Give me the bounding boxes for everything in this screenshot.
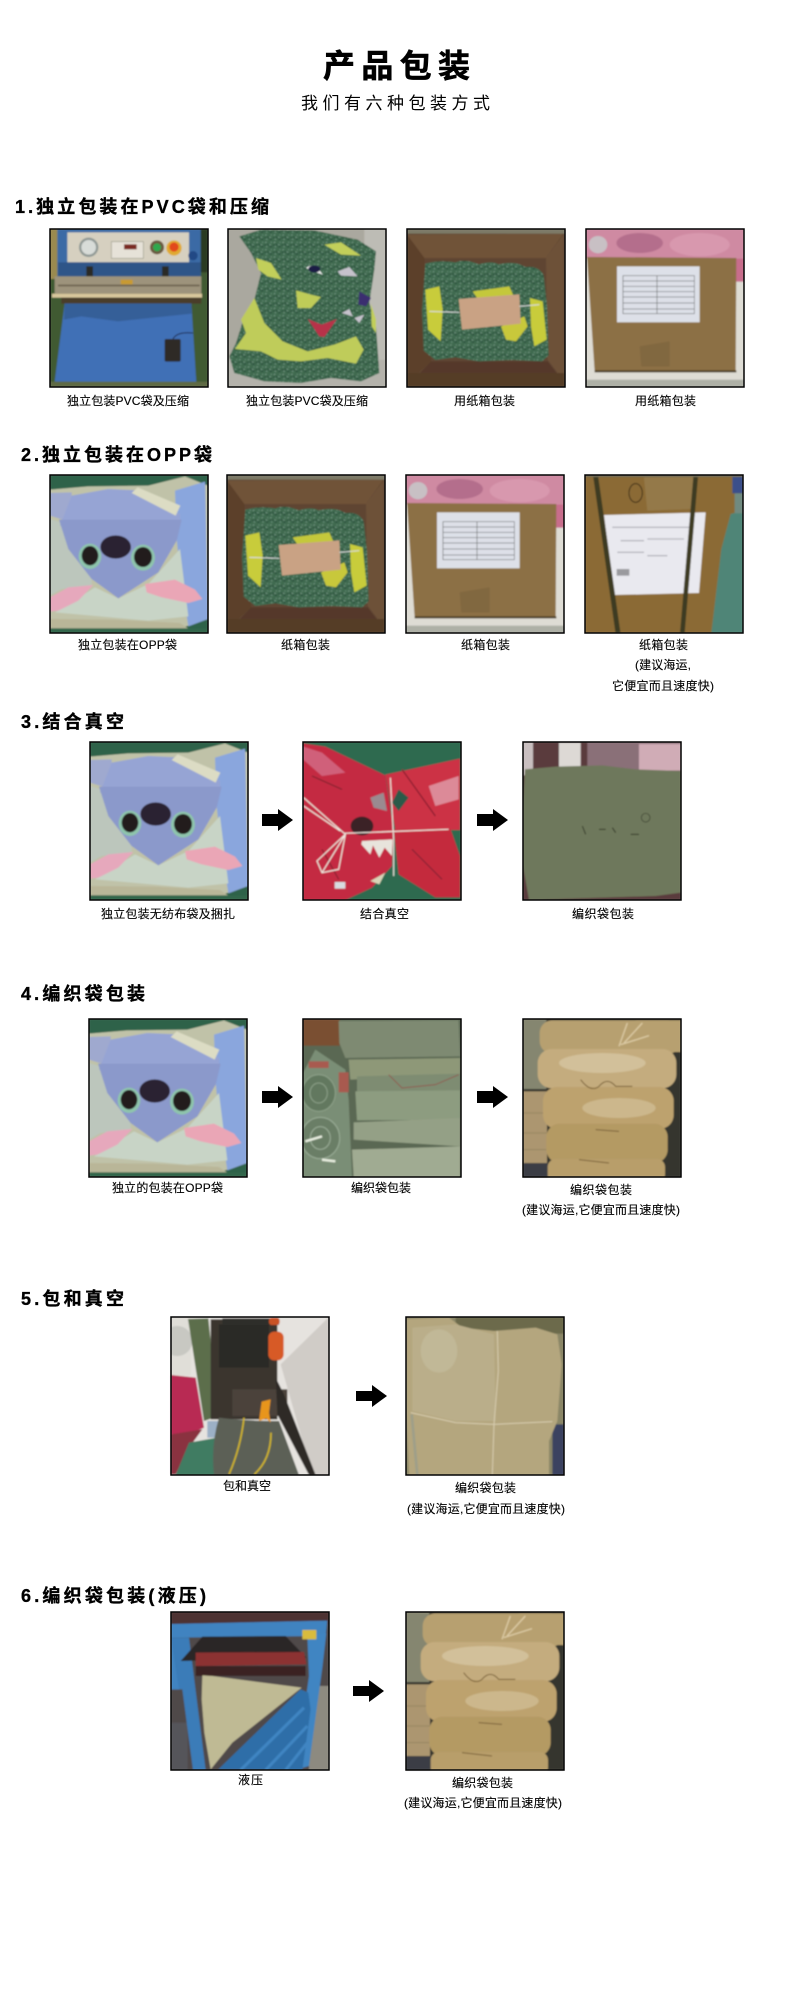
caption: hydraulic: 液压 bbox=[238, 1772, 263, 1787]
photo: plush in OPP bag bbox=[89, 1019, 247, 1177]
caption: vacuum pump: 包和真空 bbox=[223, 1479, 271, 1493]
title: 产品包装 bbox=[323, 48, 470, 84]
photo: vacuum sealing machine bbox=[50, 229, 208, 387]
caption: OPP bag: 独立包装在OPP袋 bbox=[78, 637, 177, 652]
caption: sealing machine: 独立包装PVC袋及压缩 bbox=[67, 393, 189, 408]
heading 4: 4.编织袋包装 bbox=[21, 983, 145, 1004]
section 5: bale and vacuum bbox=[21, 1288, 565, 1516]
heading 6: 6.编织袋包装(液压) bbox=[21, 1585, 206, 1606]
photo: woven sack bbox=[523, 742, 681, 900]
arrow bbox=[477, 809, 508, 831]
caption: woven sack: 编织袋包装 bbox=[572, 906, 634, 921]
arrow bbox=[353, 1680, 384, 1702]
photo: baled sack with seams bbox=[406, 1317, 564, 1475]
caption: baled sack with note: (建议海运,它便宜而且速度快) bbox=[407, 1501, 565, 1516]
photo: strapped carton bbox=[585, 475, 743, 633]
section 1: PVC bag and compression bbox=[15, 196, 744, 408]
heading 5: 5.包和真空 bbox=[21, 1288, 124, 1309]
photo: hydraulic press bbox=[171, 1612, 329, 1770]
caption: strapped carton with note: (建议海运, bbox=[635, 657, 691, 672]
heading 1: 1.独立包装在PVC袋和压缩 bbox=[15, 196, 269, 217]
caption: strapped carton with note: 纸箱包装 bbox=[639, 637, 688, 652]
photo: plush in OPP bag bbox=[50, 475, 208, 633]
caption: baled sack with note: 编织袋包装 bbox=[455, 1480, 516, 1495]
photo: sealed carton bbox=[406, 475, 564, 633]
caption: sealed carton: 用纸箱包装 bbox=[635, 393, 696, 408]
subtitle: 我们有六种包装方式 bbox=[301, 94, 490, 113]
photo: open carton bbox=[407, 229, 565, 387]
caption: pressed sacks with note bbox=[404, 1775, 562, 1810]
photo: rolled woven bags bbox=[301, 1019, 461, 1177]
photo: plush in non-woven bag bbox=[90, 742, 248, 900]
caption: non-woven bag: 独立包装无纺布袋及捆扎 bbox=[101, 906, 235, 921]
photo: compressed PVC bag bbox=[228, 229, 386, 387]
arrow bbox=[262, 809, 293, 831]
photo: red vacuum bundle bbox=[303, 742, 461, 900]
photo: stacked tan sacks bbox=[523, 1019, 681, 1182]
caption: compressed bag: 独立包装PVC袋及压缩 bbox=[246, 393, 368, 408]
caption: pressed sacks with note: 编织袋包装 bbox=[452, 1775, 513, 1790]
caption: carton: 纸箱包装 bbox=[461, 637, 510, 652]
arrow bbox=[477, 1086, 508, 1108]
caption: carton: 纸箱包装 bbox=[281, 637, 330, 652]
photo: open carton bbox=[227, 475, 385, 633]
section 2: OPP bag bbox=[21, 444, 743, 693]
section 4: woven bag bbox=[21, 983, 681, 1217]
caption: woven bags: 编织袋包装 bbox=[351, 1180, 411, 1195]
caption: pressed sacks with note: (建议海运,它便宜而且速度快) bbox=[404, 1795, 562, 1810]
heading 2: 2.独立包装在OPP袋 bbox=[21, 444, 212, 465]
section 6: hydraulic woven bag bbox=[21, 1585, 564, 1810]
arrow bbox=[356, 1385, 387, 1407]
caption: combined vacuum: 结合真空 bbox=[360, 906, 409, 921]
caption: strapped carton with note: 它便宜而且速度快) bbox=[612, 678, 714, 693]
caption: baled sack with note bbox=[407, 1480, 565, 1516]
caption: strapped carton with note bbox=[612, 637, 714, 693]
section 3: combined vacuum bbox=[21, 711, 681, 921]
photo: pressed tan sacks bbox=[406, 1612, 564, 1775]
caption: stacked sacks with note bbox=[522, 1182, 680, 1217]
arrow bbox=[262, 1086, 293, 1108]
photo: vacuum pump bbox=[162, 1317, 329, 1475]
photo: sealed carton bbox=[586, 229, 744, 387]
caption: stacked sacks with note: 编织袋包装 bbox=[570, 1182, 632, 1197]
caption: OPP bag: 独立的包装在OPP袋 bbox=[112, 1180, 223, 1195]
caption: open carton: 用纸箱包装 bbox=[454, 393, 515, 408]
caption: stacked sacks with note: (建议海运,它便宜而且速度快) bbox=[522, 1202, 680, 1217]
heading 3: 3.结合真空 bbox=[21, 711, 124, 732]
